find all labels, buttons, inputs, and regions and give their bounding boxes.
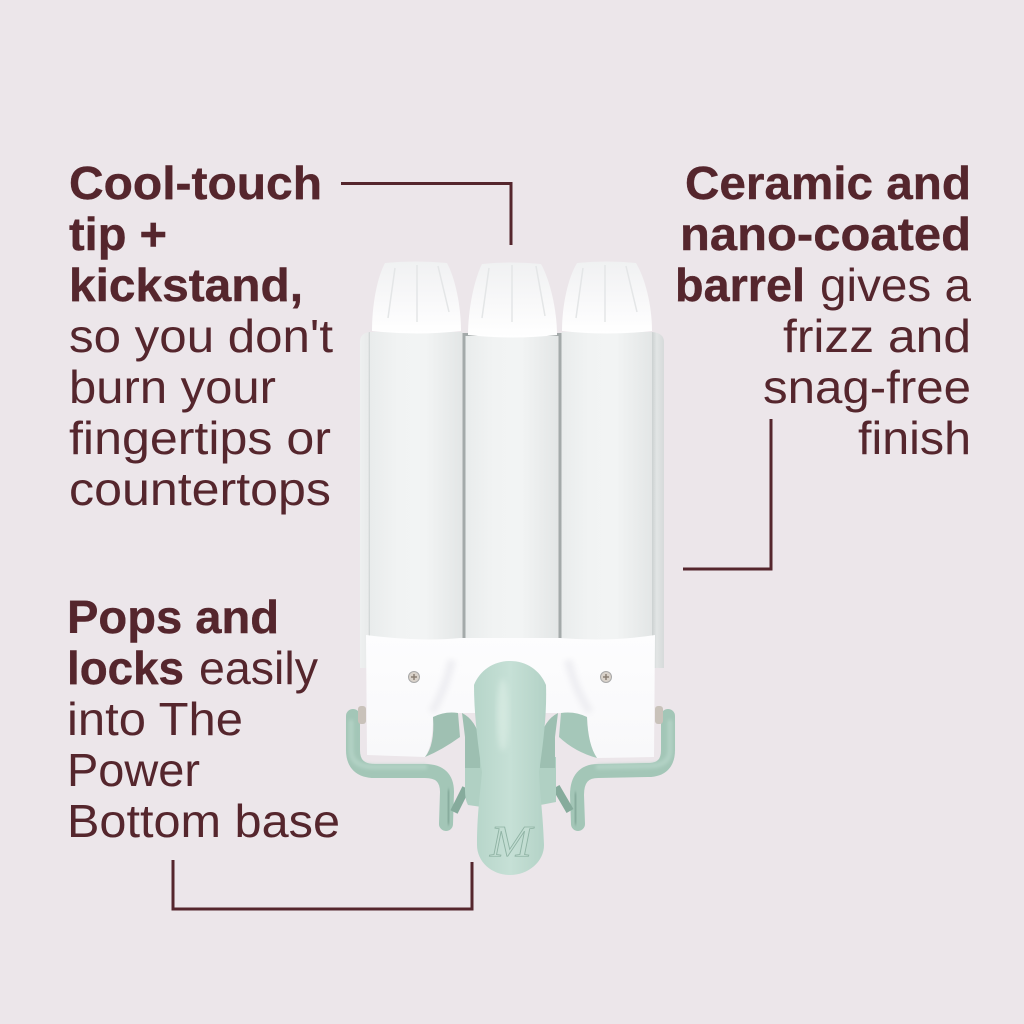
side plate: left [360,332,370,668]
text block: ceramic barrel: barrel [675,259,805,311]
text block: ceramic barrel: frizz and [783,310,971,362]
text block: pops and locks: Bottom base [67,795,340,847]
leader line: ceramic barrel [683,419,771,569]
text block: pops and locks: into The [67,693,243,745]
mint wire: right [575,716,670,824]
tip: right [562,262,652,334]
text block: cool-touch tip: tip + [69,208,167,260]
tip: left [372,262,461,334]
leader line: cool-touch tip [341,184,511,245]
pivot screw: left [358,706,366,724]
text block: pops and locks: Pops and [67,591,279,643]
screw: right [600,672,612,682]
clip arms [462,713,558,768]
text block: ceramic barrel: Ceramic and [685,157,971,209]
text block: cool-touch tip: burn your [69,361,276,413]
text block: ceramic barrel: finish [858,412,971,464]
text block: pops and locks [67,591,340,847]
screw: left [408,672,420,682]
mint wire: left [351,716,449,824]
text block: ceramic barrel: nano-coated [680,208,971,260]
collar [366,635,655,758]
text block: ceramic barrel [675,157,971,464]
text block: ceramic barrel: snag-free [763,361,971,413]
text block: cool-touch tip: so you don't [69,310,333,362]
text block: cool-touch tip [69,157,333,515]
inner bracket: left [425,712,460,757]
barrel: right [562,332,652,642]
text block: cool-touch tip: kickstand, [69,259,303,311]
inner bracket: right [559,712,597,758]
text block: pops and locks: locks [67,642,184,694]
pivot screw: right [655,706,663,724]
clip band [465,757,556,808]
wire struts [454,787,570,812]
product: triple barrel waver [351,262,670,875]
collar contour shading [432,660,590,712]
text block: pops and locks: easily [199,642,318,694]
tip: middle [468,262,557,338]
text block: cool-touch tip: fingertips or [69,412,331,464]
text block: cool-touch tip: countertops [69,463,331,515]
logo monogram: M [489,817,535,866]
clip lever [474,661,546,875]
barrel: middle [466,336,558,642]
text block: cool-touch tip: Cool-touch [69,157,322,209]
text block: ceramic barrel: gives a [820,259,971,311]
lever highlight [497,679,509,751]
side plate: right [652,332,664,668]
leader line: base [173,860,472,909]
text block: pops and locks: Power [67,744,200,796]
barrel: left [370,332,462,642]
barrel gaps [462,333,562,643]
